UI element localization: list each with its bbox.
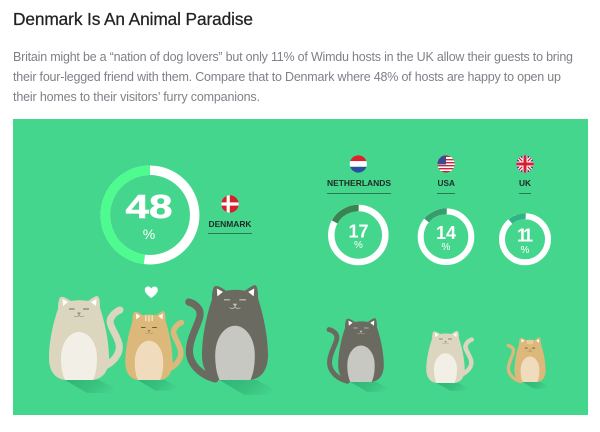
icon: heart <box>145 286 158 298</box>
donut: USA 14%: 14 <box>436 223 456 243</box>
cat: small cream <box>426 331 474 391</box>
donut: Denmark 48%: 48 <box>126 188 172 225</box>
label: Denmark <box>208 219 252 234</box>
donut: UK 11%: 11 <box>517 226 533 246</box>
donut: USA 14% <box>421 211 471 262</box>
cat: small grey <box>329 318 394 392</box>
label: UK: UK <box>519 178 531 188</box>
panel: green infographic background <box>13 119 588 415</box>
donut: Denmark 48% <box>105 170 195 260</box>
donut: UK 11%: % <box>521 245 530 256</box>
donut: Netherlands 17% <box>331 208 385 262</box>
label: Netherlands: NETHERLANDS <box>327 178 391 188</box>
label: Netherlands <box>327 178 391 194</box>
cat: small tabby <box>508 337 553 389</box>
flag: USA <box>437 155 455 173</box>
label: Denmark: DENMARK <box>208 219 252 229</box>
flag: Denmark <box>221 195 239 213</box>
intro paragraph: their homes to their visitors’ furry companions. <box>13 90 260 104</box>
intro paragraph: their four-legged friend with them. Compare that to Denmark where 48% of hosts are happy to open up <box>13 70 561 84</box>
intro paragraph <box>13 50 573 104</box>
cat: large grey <box>189 285 283 395</box>
label: USA: USA <box>438 178 455 188</box>
donut: Netherlands 17%: 17 <box>348 220 368 242</box>
flag: Netherlands <box>349 155 368 173</box>
donut: Denmark 48%: % <box>143 226 155 242</box>
cat: large tabby <box>125 311 184 391</box>
flag: UK <box>516 155 534 173</box>
title: Denmark Is An Animal Paradise <box>13 9 253 29</box>
cat: large cream <box>49 296 123 393</box>
donut: USA 14%: % <box>442 242 451 253</box>
intro paragraph: Britain might be a “nation of dog lovers” but only 11% of Wimdu hosts in the UK allow their guests to bring <box>13 50 573 64</box>
donut: Netherlands 17%: % <box>354 240 363 251</box>
donut: UK 11% <box>502 216 548 262</box>
label: USA <box>437 178 455 194</box>
label: UK <box>519 178 531 194</box>
